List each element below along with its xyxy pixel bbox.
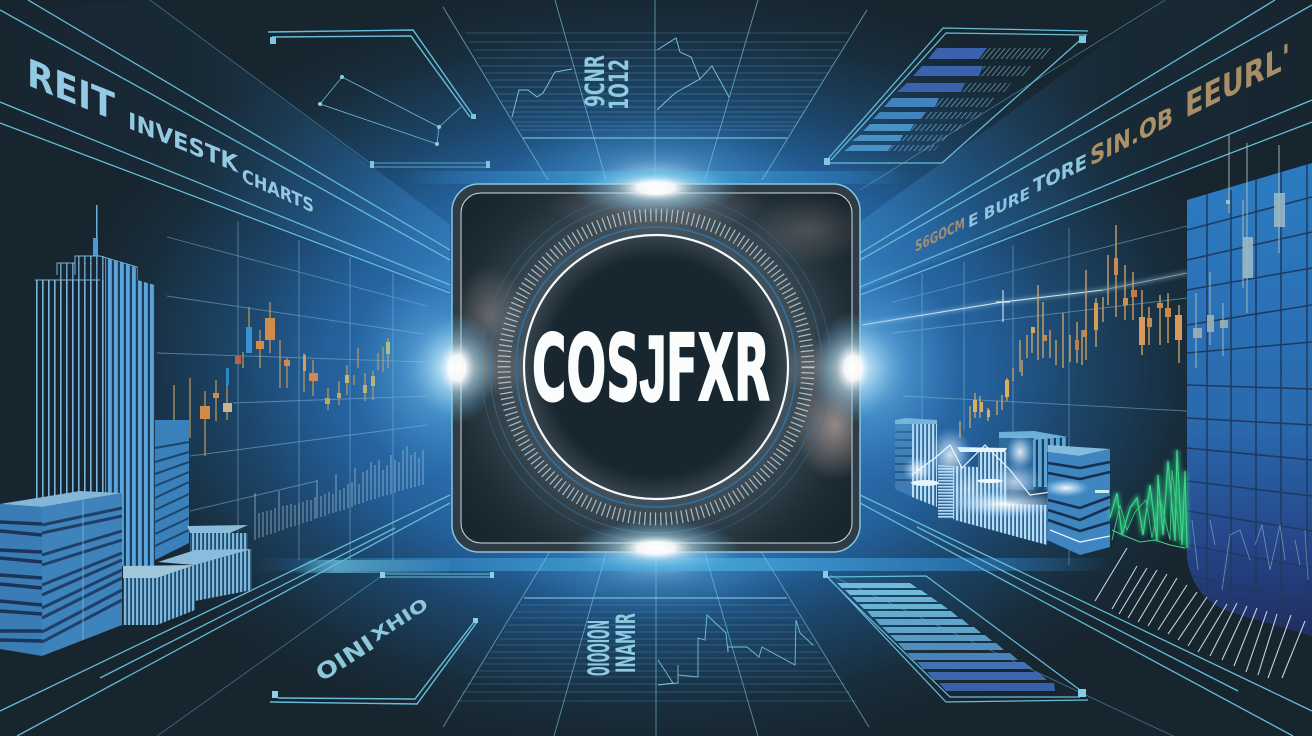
bottom left light patch <box>287 560 450 573</box>
ceiling left bracket with constellation <box>268 30 490 168</box>
floor right bar panel <box>823 571 1088 702</box>
left wall band <box>0 0 450 290</box>
diagonal white ticks <box>1095 548 1305 678</box>
ceiling perspective grid <box>443 0 867 180</box>
infographic scene: OIOOION <box>582 620 616 676</box>
wall text left: REIT <box>27 50 115 130</box>
top soft glow <box>506 117 806 227</box>
ring ticks <box>504 215 808 519</box>
wall text right: TORE <box>1033 149 1087 199</box>
main circle <box>524 235 788 499</box>
wall text right: E BURE <box>968 183 1030 232</box>
left second tower <box>155 420 189 560</box>
right central glowing buildings <box>902 427 1065 545</box>
floor left bracket <box>270 572 494 704</box>
ceiling right bar panel <box>824 28 1088 165</box>
panel squiggles <box>1192 520 1308 590</box>
left front building <box>0 491 122 656</box>
floor left label: XHIO <box>368 595 432 646</box>
ceiling rotated label: 1O12 <box>604 59 635 110</box>
right wall band <box>860 0 1312 290</box>
left candlestick chart <box>174 302 390 456</box>
wall text right: S6GOCM <box>915 213 965 256</box>
main ticker text: COSJFXR <box>532 315 770 422</box>
wall text left: INVESTK <box>128 107 239 179</box>
floor perspective grid <box>443 550 869 736</box>
right gold candlesticks <box>960 225 1182 438</box>
central panel <box>451 183 861 553</box>
side glow right <box>782 258 962 478</box>
green line chart <box>1110 450 1187 548</box>
bottom light band <box>253 558 1113 571</box>
floor left label <box>312 595 432 687</box>
right pale candlesticks <box>1193 135 1285 368</box>
right glowing trend line <box>862 273 1187 325</box>
light flares <box>417 160 893 576</box>
outer blue rings <box>481 192 831 542</box>
left main tower <box>35 205 155 566</box>
left volume ticks <box>255 446 423 540</box>
right chart grid <box>893 226 1187 565</box>
floor rotated label <box>582 613 642 676</box>
floor line chart <box>658 615 813 685</box>
right front building <box>1042 445 1110 555</box>
side glow left <box>350 258 530 478</box>
left small blocks <box>123 525 252 625</box>
left chart grid <box>157 222 427 560</box>
ceiling line charts <box>512 38 729 117</box>
floor left label: OINI <box>312 631 379 687</box>
wall text right <box>915 37 1290 256</box>
bottom soft glow <box>506 509 806 619</box>
wall text left: CHARTS <box>242 165 314 218</box>
right big blue panel <box>1187 160 1312 640</box>
ceiling rotated label: 9CNR <box>580 55 611 107</box>
ceiling rotated label <box>580 55 635 110</box>
top light band <box>400 171 912 184</box>
floor rotated label: INAMIR <box>611 613 642 673</box>
wall text right: SIN.OB <box>1090 101 1173 173</box>
wall text left <box>27 50 314 218</box>
right rear building <box>895 418 1068 507</box>
